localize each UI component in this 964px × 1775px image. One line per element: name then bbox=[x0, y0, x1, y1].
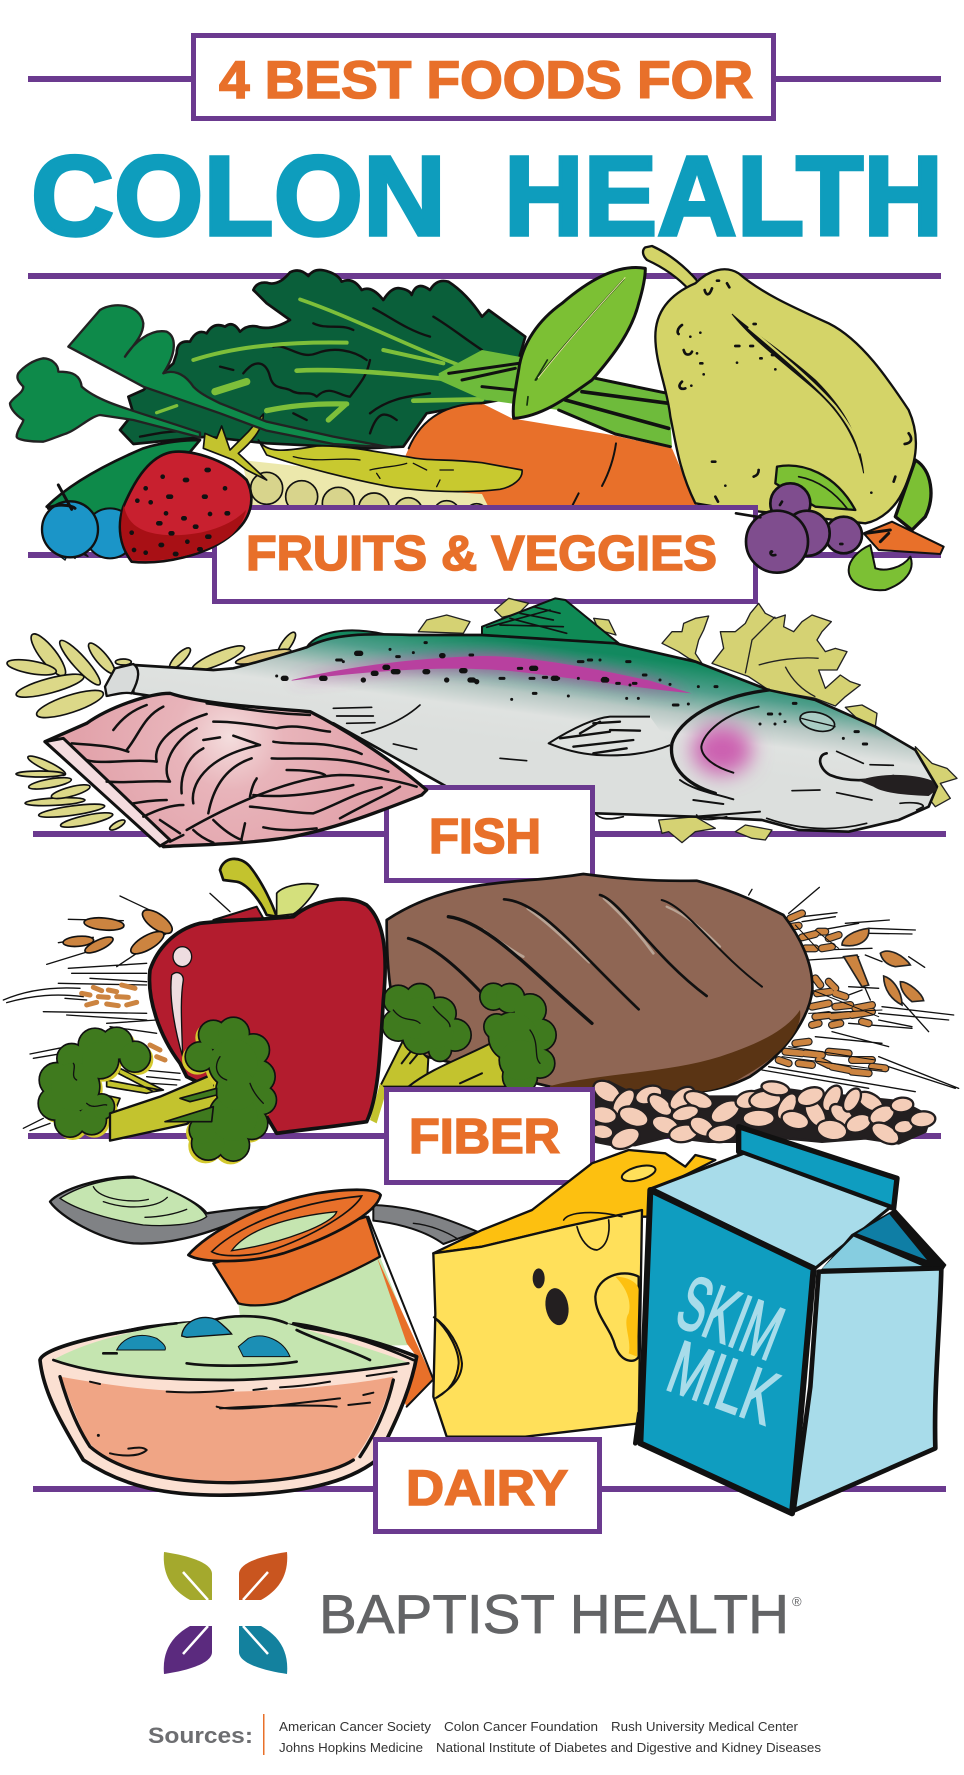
illustration: red apple and broccoli bbox=[39, 859, 555, 1163]
illustration: wheat right bbox=[749, 887, 959, 1092]
panel: dairy bbox=[33, 1127, 946, 1532]
icon: kale bbox=[120, 270, 525, 448]
panel: fish bbox=[6, 598, 957, 880]
sources bbox=[148, 1714, 822, 1755]
icon: yogurt bowl with blueberries bbox=[40, 1316, 417, 1495]
icon: left herb sprigs bbox=[6, 630, 299, 832]
label box: dairy: DAIRY bbox=[406, 1460, 568, 1516]
icon: cheese wedge bbox=[433, 1150, 715, 1437]
label box: fiber bbox=[386, 1090, 592, 1182]
text: sources label: Sources: bbox=[148, 1723, 253, 1748]
label box: fish: FISH bbox=[429, 810, 541, 864]
text: skim milk: MILK bbox=[658, 1324, 789, 1440]
icon: skim milk carton bbox=[635, 1127, 945, 1513]
icon: fish body bbox=[105, 598, 937, 832]
icon: strawberry and blueberries bbox=[42, 414, 267, 562]
icon: bread loaf bbox=[387, 874, 812, 1093]
label box: fruits and veggies: FRUITS & VEGGIES bbox=[246, 527, 717, 581]
text: skim milk: SKIM bbox=[667, 1260, 794, 1377]
text: source list bbox=[279, 1719, 822, 1755]
icon: tail bbox=[105, 664, 138, 696]
icon: stems and carrot bbox=[382, 268, 699, 510]
title: colon health: COLON bbox=[31, 133, 446, 259]
icon: apple bbox=[149, 859, 387, 1133]
text: source list: Johns Hopkins Medicine bbox=[279, 1740, 423, 1755]
illustration: leafy greens, carrot, pea pod, pear bbox=[120, 246, 916, 527]
panel: fiber bbox=[3, 859, 959, 1182]
label box: fiber: FIBER bbox=[409, 1110, 560, 1164]
text: baptist health wordmark: ® bbox=[792, 1594, 802, 1609]
label box: fish bbox=[386, 788, 592, 880]
illustration: whole fish with herbs bbox=[6, 598, 957, 843]
icon: left broccoli bbox=[39, 1018, 276, 1163]
icon: pea pod bbox=[242, 440, 522, 527]
text: source list: National Institute of Diabetes and Digestive and Kidney Diseases bbox=[436, 1740, 822, 1755]
icon: pear and stem bbox=[643, 246, 916, 523]
heading box: 4 best foods for: 4 BEST FOODS FOR bbox=[219, 51, 753, 110]
icon: beans bbox=[589, 1076, 936, 1153]
icon: green leafy stalks bbox=[10, 305, 390, 447]
text: baptist health wordmark: BAPTIST HEALTH bbox=[319, 1583, 789, 1645]
panel: header bbox=[28, 36, 943, 279]
label box: dairy bbox=[376, 1440, 600, 1532]
title: colon health: HEALTH bbox=[504, 133, 943, 259]
title: colon health bbox=[31, 133, 943, 259]
panel: fruits and veggies bbox=[10, 246, 944, 602]
icon: salmon fillet bbox=[45, 693, 427, 847]
icon: right broccoli bbox=[380, 984, 555, 1093]
icon: grapes, carrot tip and ribbon bbox=[736, 460, 944, 590]
icon: big leaf bbox=[513, 268, 645, 418]
logo: baptist health bbox=[164, 1552, 802, 1674]
icon: spoon and yogurt cup bbox=[50, 1177, 477, 1407]
label box: fruits and veggies bbox=[214, 508, 756, 602]
icon: four leaf mark bbox=[164, 1552, 287, 1674]
text: source list: Rush University Medical Center bbox=[611, 1719, 799, 1734]
text: source list: American Cancer Society bbox=[279, 1719, 432, 1734]
illustration: wheat left bbox=[3, 893, 230, 1131]
heading box: 4 best foods for bbox=[194, 36, 774, 118]
text: source list: Colon Cancer Foundation bbox=[444, 1719, 598, 1734]
text: skim milk bbox=[658, 1260, 794, 1440]
icon: parsley behind fish bbox=[418, 598, 957, 843]
